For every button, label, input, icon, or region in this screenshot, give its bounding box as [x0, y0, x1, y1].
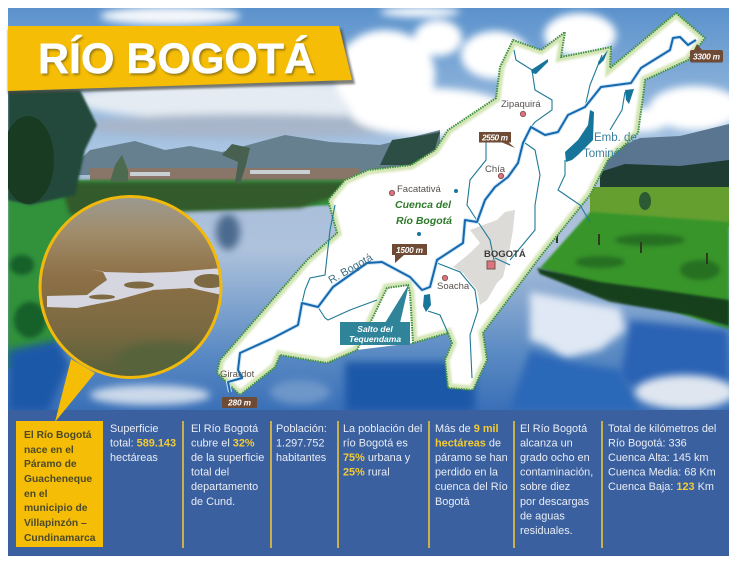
city: Bogotá	[484, 249, 526, 269]
text: cobertura: total del	[191, 466, 229, 478]
yellow box: nacimiento: El Río Bogotá	[24, 430, 92, 441]
city: Facatativá: Facatativá	[397, 184, 442, 195]
text: superficie: Superficie	[110, 423, 158, 435]
text: población: habitantes	[276, 452, 327, 464]
text: contaminación: El Río Bogotá	[520, 423, 588, 435]
water reflections	[8, 214, 735, 412]
Tequendama notch fill	[357, 285, 413, 350]
city: Zipaquirá: Zipaquirá	[501, 99, 541, 110]
city: Soacha: Soacha	[437, 281, 470, 292]
map: Cuenca del Río Bogotá	[217, 13, 723, 408]
altitude tag: 2550 m: 2550 m	[481, 132, 509, 142]
text: cobertura: departamento	[191, 481, 258, 493]
text: urbana y rural: 75% urbana y	[343, 452, 411, 464]
label: R. Bogotá: R. Bogotá	[326, 251, 376, 287]
text: páramo perdido: cuenca del Río	[435, 481, 508, 493]
altitude tag: 3300 m: 3300 m	[693, 52, 721, 62]
text: kilómetros: Río Bogotá: 336	[608, 438, 687, 450]
label: Cuenca del Río Bogotá: Río Bogotá	[396, 215, 452, 227]
label: Emb. de Tominé: Emb. de	[594, 132, 637, 144]
information panel	[8, 410, 729, 556]
right bank grass	[537, 187, 729, 330]
text: páramo perdido	[435, 423, 508, 508]
fence posts	[556, 232, 708, 264]
text: superficie: total: 589.143	[110, 438, 176, 450]
text: kilómetros: Cuenca Baja: 123 Km	[608, 481, 714, 493]
title banner	[8, 26, 355, 94]
text: cobertura: El Río Bogotá	[191, 423, 259, 435]
mountains	[75, 124, 729, 188]
yellow box: nacimiento: en el	[24, 489, 48, 500]
text: kilómetros: Total de kilómetros del	[608, 423, 716, 435]
left bank grass	[8, 180, 345, 370]
text: contaminación: de aguas	[520, 510, 565, 522]
text: contaminación: residuales.	[520, 525, 573, 537]
city: Girardot: Girardot	[220, 369, 255, 380]
text: contaminación: grado ocho en	[520, 452, 590, 464]
text: páramo perdido: Más de 9 mil	[435, 423, 499, 435]
text: superficie: hectáreas	[110, 452, 158, 464]
yellow box: nacimiento: Cundinamarca	[24, 533, 96, 544]
text: páramo perdido: hectáreas de	[435, 438, 501, 450]
altitude tag: 280 m	[222, 397, 257, 408]
text: población: 1.297.752	[276, 438, 324, 450]
basin fill	[217, 13, 705, 395]
text: cobertura	[191, 423, 264, 508]
column dividers	[182, 421, 603, 548]
text: kilómetros: Cuenca Media: 68 Km	[608, 466, 716, 478]
text: contaminación: alcanza un	[520, 438, 573, 450]
text: contaminación: sobre diez	[520, 481, 570, 493]
text: kilómetros: Cuenca Alta: 145 km	[608, 452, 708, 464]
text: páramo perdido: Bogotá	[435, 496, 470, 508]
sky	[8, 7, 736, 168]
altitude tag: 1500 m	[392, 244, 427, 263]
text: kilómetros	[608, 423, 716, 493]
yellow box: nacimiento: municipio de	[24, 503, 88, 514]
text: cobertura: de Cund.	[191, 496, 235, 508]
background photo: river landscape	[2, 7, 736, 412]
tributaries	[302, 50, 625, 378]
city: Bogotá: BOGOTÁ	[484, 249, 526, 260]
city: Soacha	[437, 275, 470, 292]
text: urbana y rural	[343, 423, 422, 478]
text: superficie	[110, 423, 176, 464]
label: Tominé: Tominé	[583, 148, 620, 160]
text: urbana y rural: 25% rural	[343, 466, 390, 478]
trees left	[2, 90, 250, 205]
main river	[228, 37, 696, 392]
Bogotá urban area	[453, 210, 515, 305]
text: contaminación: por descargas	[520, 496, 590, 508]
text: urbana y rural: La población del	[343, 423, 422, 435]
yellow box: nacimiento: Páramo de	[24, 459, 77, 470]
text: urbana y rural: río Bogotá es	[343, 438, 408, 450]
altitude tag: 3300 m	[690, 44, 723, 62]
yellow box: nacimiento: nace en el	[24, 445, 74, 456]
callout: Salto del Tequendama: Tequendama	[349, 334, 401, 344]
altitude tag: 2550 m	[479, 132, 515, 148]
text: páramo perdido: perdido en la	[435, 466, 499, 478]
altitude tag: 280 m: 280 m	[227, 398, 252, 408]
yellow box: nacimiento: Guacheneque	[24, 474, 92, 485]
yellow box: nacimiento	[16, 421, 103, 547]
yellow box: nacimiento: Villapinzón –	[24, 518, 87, 529]
text: cobertura: cubre el 32%	[191, 438, 255, 450]
text: población: Población:	[276, 423, 327, 435]
title banner: RÍO BOGOTÁ	[40, 37, 317, 85]
altitude tag: 1500 m: 1500 m	[396, 245, 424, 255]
text: contaminación: contaminación,	[520, 466, 593, 478]
callout pointer	[55, 359, 95, 422]
callout: Salto del Tequendama: Salto del	[357, 324, 393, 334]
basin outline	[217, 13, 705, 395]
label: Cuenca del Río Bogotá	[395, 199, 452, 227]
basin inner glow	[217, 13, 705, 395]
text: cobertura: de la superficie	[191, 452, 264, 464]
circular photo: páramo de Guacheneque	[40, 196, 226, 378]
title banner: RÍO BOGOTÁ	[38, 35, 315, 83]
lakes	[417, 50, 634, 312]
city: Chía: Chía	[485, 164, 506, 175]
label: Cuenca del Río Bogotá: Cuenca del	[395, 199, 452, 211]
text: páramo perdido: páramo se han	[435, 452, 508, 464]
text: contaminación	[520, 423, 593, 537]
text: población	[276, 423, 327, 464]
callout: Salto del Tequendama	[340, 284, 410, 345]
city: Zipaquirá	[501, 99, 541, 117]
